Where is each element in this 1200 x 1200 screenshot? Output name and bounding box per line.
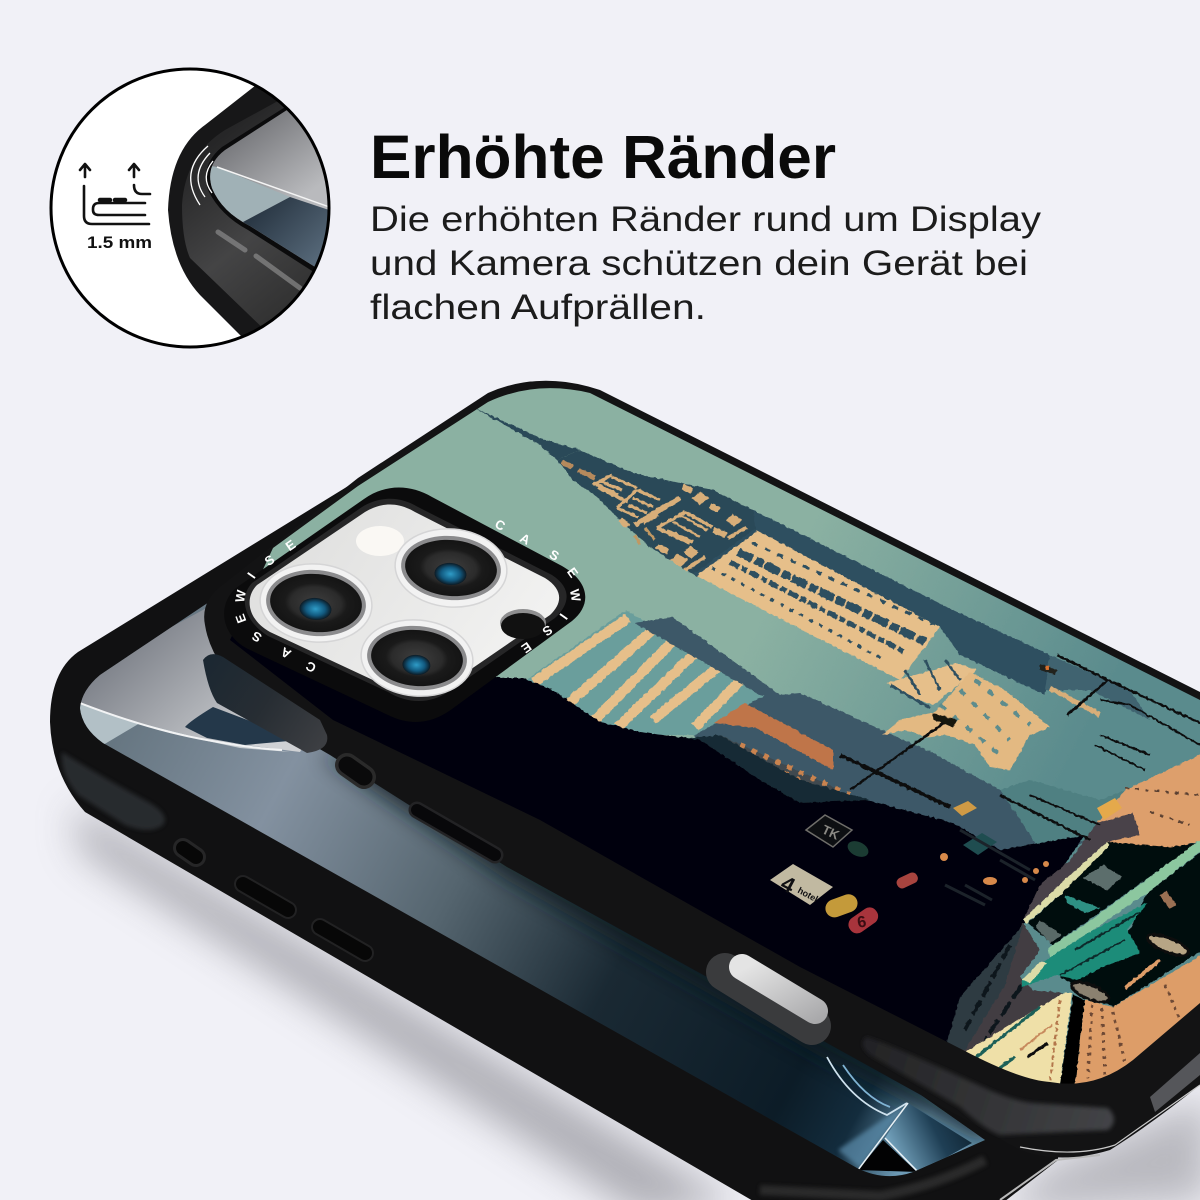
car light green stripe xyxy=(1048,840,1200,957)
inset outer frame xyxy=(168,70,345,345)
lower phone screen xyxy=(80,604,985,1176)
cream sidewalk xyxy=(965,993,1072,1085)
ring brand text: left side: C xyxy=(303,658,319,676)
ring brand text: right side: S xyxy=(547,546,562,564)
blob gaps xyxy=(940,680,1030,755)
description text: flachen Aufprällen. xyxy=(370,288,706,327)
artwork: pixel city street xyxy=(210,370,1200,1100)
inset screen xyxy=(200,95,340,280)
description text xyxy=(370,200,1042,327)
empire state tower xyxy=(473,407,1050,708)
orange road xyxy=(1075,950,1200,1090)
artwork scenery xyxy=(210,370,1200,1100)
car rear black mass xyxy=(1060,845,1200,1007)
ring brand text: right side: W xyxy=(567,588,584,603)
traffic light right xyxy=(1040,664,1058,675)
lower road base xyxy=(962,923,1063,1052)
car cabin xyxy=(1028,842,1197,945)
description text: Die erhöhten Ränder rund um Display xyxy=(370,200,1042,239)
teal car xyxy=(1022,840,1200,1007)
grey wallpaper wedge xyxy=(80,609,302,752)
icon label: 1.5 mm xyxy=(87,234,152,252)
upper phone corner patch xyxy=(203,654,327,753)
car teal body xyxy=(1022,903,1147,987)
upper shade xyxy=(680,483,1050,695)
ring brand text: left side: S xyxy=(249,628,264,646)
striped building shade xyxy=(634,617,780,695)
inset white disc xyxy=(51,69,329,347)
small orange lights xyxy=(940,853,1049,885)
right pavement xyxy=(1097,750,1200,850)
inset border xyxy=(51,69,329,347)
car small window xyxy=(1035,920,1062,943)
description text: und Kamera schützen dein Gerät bei xyxy=(370,244,1028,283)
traffic light left xyxy=(933,713,957,727)
lower phone volume up button xyxy=(243,884,288,910)
tower lower block xyxy=(887,663,977,705)
shop sign letters: TK xyxy=(820,822,842,843)
lidar xyxy=(500,609,546,639)
car windscreen xyxy=(1083,865,1122,890)
camera ring inner wall xyxy=(245,499,567,701)
sky xyxy=(210,370,1200,1100)
crown square ornaments xyxy=(670,492,742,567)
tan streak xyxy=(1050,688,1100,715)
car taillight xyxy=(1163,893,1173,907)
inset phone corner xyxy=(168,70,345,345)
icon: raised edge profile xyxy=(80,164,150,224)
lower phone corner patch xyxy=(62,752,165,830)
teal sign xyxy=(963,833,997,855)
cream sidewalk marks xyxy=(975,1000,1060,1082)
lens: left xyxy=(257,559,375,647)
side button face xyxy=(417,810,495,855)
crown tan bars xyxy=(562,462,747,570)
ring brand text: left side: E xyxy=(283,536,299,554)
lens: bottom xyxy=(358,615,476,701)
distant teal block xyxy=(1000,780,1125,850)
ring brand text: left side: S xyxy=(262,551,278,569)
ring brand text: left side xyxy=(232,536,319,676)
orange building xyxy=(714,703,833,770)
orange sign xyxy=(953,801,977,816)
traffic light lamp xyxy=(1045,666,1049,670)
lower phone case xyxy=(50,480,1100,1200)
crown xyxy=(557,450,756,577)
car orange reflection xyxy=(1125,960,1160,988)
kerb black stripe xyxy=(1060,995,1085,1085)
pavement marks xyxy=(1125,788,1200,825)
lower road blue strip xyxy=(945,925,1023,1050)
main tan block xyxy=(695,530,940,680)
green sign xyxy=(845,838,871,860)
lower phone volume down face xyxy=(320,927,365,953)
light rays at bottom xyxy=(838,1103,907,1168)
red pill sign xyxy=(895,871,920,890)
ring brand text: left side: A xyxy=(278,644,294,662)
shop sign outline xyxy=(806,815,852,847)
lower phone frame xyxy=(50,480,1060,1200)
car cream roof edge xyxy=(1023,842,1110,923)
orange building windows xyxy=(720,735,840,790)
inset highlight stripes xyxy=(218,232,300,288)
lower phone action button face xyxy=(183,848,196,857)
road dark stripes xyxy=(965,945,1022,1040)
mute switch face xyxy=(347,765,364,777)
traffic lights and wires xyxy=(840,655,1200,840)
lower phone action button xyxy=(183,848,196,857)
ring brand text: left side: I xyxy=(244,570,258,581)
inset circle: raised edge detail xyxy=(51,69,345,347)
mute switch xyxy=(347,765,364,777)
lens: right xyxy=(392,524,510,612)
inset screen border xyxy=(206,100,345,276)
ring brand text: right side: A xyxy=(517,530,533,548)
red number sign: 6 xyxy=(856,914,868,932)
ring brand text: right side: E xyxy=(518,639,534,657)
car rear wheel xyxy=(1145,930,1191,960)
tower windows xyxy=(695,530,935,660)
top phone cast shadow xyxy=(320,755,1000,1145)
striped building teal base xyxy=(523,610,765,735)
inset soft band xyxy=(182,96,330,335)
ring brand text: right side: I xyxy=(557,611,571,622)
lower phone volume down button xyxy=(320,927,365,953)
camera module xyxy=(224,487,585,722)
lower phone drop shadow xyxy=(75,805,1200,1200)
upper phone edge highlight xyxy=(1020,1085,1200,1152)
lower phone frame highlight xyxy=(760,1160,985,1196)
camera ring xyxy=(224,487,585,722)
ring brand text: right side: C xyxy=(492,516,508,534)
lower phone volume up face xyxy=(243,884,288,910)
brown road near car xyxy=(1023,813,1140,920)
flash xyxy=(356,526,404,556)
orange road dashes xyxy=(1088,985,1180,1078)
black foreground mass xyxy=(220,630,1085,1050)
upper phone bottom patch xyxy=(863,1037,1114,1135)
beige sign with number: 4 xyxy=(777,871,800,899)
ring brand text: left side: E xyxy=(232,612,249,625)
car front wheel xyxy=(1069,978,1111,1006)
charging port xyxy=(742,967,815,1011)
side speaker grille xyxy=(1150,1053,1200,1112)
upper phone frame xyxy=(204,381,1200,1158)
pale wedge xyxy=(80,704,138,744)
yellow sign xyxy=(1097,798,1122,820)
yellow pill sign xyxy=(823,892,860,920)
charging port socket xyxy=(725,972,812,1026)
white arc xyxy=(80,703,282,750)
antenna xyxy=(473,407,580,460)
beige sign with number xyxy=(770,864,833,905)
camera glass xyxy=(250,504,559,695)
lower phone silver edge xyxy=(1000,1155,1100,1200)
light strip under arc xyxy=(140,723,290,752)
slate building mass xyxy=(644,616,1083,850)
ring brand text: right side: E xyxy=(564,565,582,581)
dark building shadow xyxy=(686,734,870,803)
car front bumper xyxy=(1022,962,1047,983)
upper phone case xyxy=(203,381,1200,1158)
inset impact arcs xyxy=(191,146,213,205)
striped building stripes xyxy=(534,618,741,727)
ring brand text: right side: S xyxy=(539,622,555,640)
beige sign with number: hotel xyxy=(796,885,820,904)
dark blue wallpaper shape xyxy=(185,707,286,745)
red number sign xyxy=(845,904,881,937)
title: Erhöhte Ränder xyxy=(370,123,836,191)
tan rubble blob xyxy=(882,672,1050,770)
car teal wiper xyxy=(1065,895,1100,913)
ring brand text: right side xyxy=(492,516,584,657)
car body lines xyxy=(1060,912,1140,975)
upper slate streak xyxy=(1045,655,1150,720)
ring brand text: left side: W xyxy=(232,588,249,604)
street reflection lines xyxy=(945,830,1035,905)
side button xyxy=(417,810,495,855)
